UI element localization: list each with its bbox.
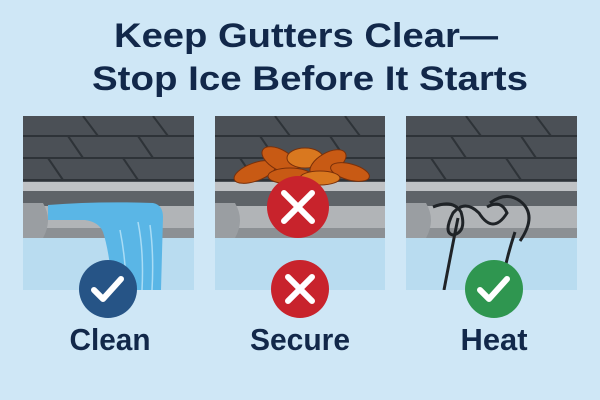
labels	[70, 322, 528, 357]
labels: Secure	[250, 322, 350, 357]
icon: x secure	[271, 260, 329, 318]
panel: clean	[23, 116, 194, 290]
icon: check heat	[465, 260, 523, 318]
title: Stop Ice Before It Starts	[92, 60, 528, 98]
labels: Clean	[70, 322, 150, 357]
water flow	[48, 202, 163, 290]
title: Keep Gutters Clear—	[114, 17, 498, 55]
icon: check clean	[79, 260, 137, 318]
title	[92, 17, 528, 98]
panel: heat	[406, 116, 577, 290]
labels: Heat	[460, 322, 528, 357]
panel: secure	[215, 116, 386, 290]
icon: red x upper	[267, 176, 329, 238]
leaves	[231, 141, 371, 188]
heat cable	[433, 196, 529, 290]
